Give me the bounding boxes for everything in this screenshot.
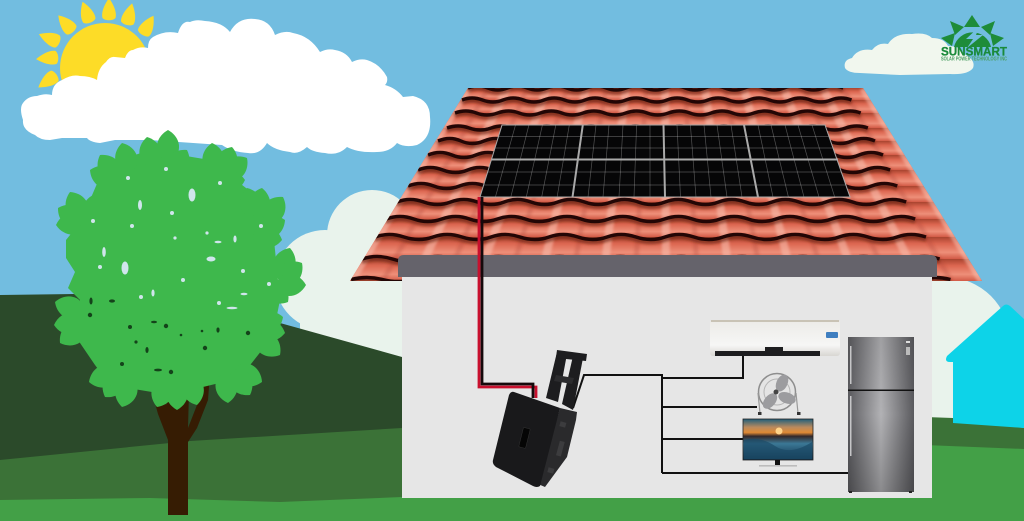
tree foliage	[51, 130, 309, 411]
tree trunk	[150, 374, 210, 515]
mid green hill, right	[925, 417, 1024, 455]
roof tile highlights	[351, 88, 982, 281]
solar cable: red and black	[479, 197, 536, 398]
refrigerator	[848, 337, 914, 493]
house wall	[402, 275, 932, 498]
panel cell grid	[470, 125, 860, 197]
television	[743, 419, 813, 467]
case front	[493, 392, 560, 487]
bright green foreground	[0, 445, 1024, 521]
logo: SunSmart	[941, 15, 1008, 62]
dark green back hill	[0, 294, 402, 470]
tiled roof	[340, 85, 990, 285]
roof tile shadow stripes	[383, 88, 951, 281]
case side	[538, 408, 577, 487]
foliage gaps showing hill	[88, 298, 250, 374]
portable power station	[493, 350, 587, 487]
floor fan	[758, 373, 800, 415]
case badge	[519, 427, 530, 448]
case latches	[547, 421, 566, 474]
solar panel array	[470, 125, 860, 197]
telescopic handle	[546, 350, 587, 410]
appliance wiring	[573, 356, 848, 473]
mid green hill, left	[0, 428, 402, 505]
small cyan house, right	[946, 304, 1024, 428]
pale background clouds	[275, 190, 1010, 425]
large white cloud	[21, 19, 430, 154]
foliage gaps showing sky	[91, 167, 271, 309]
small cloud, top right	[845, 34, 974, 75]
tree	[51, 130, 309, 515]
air conditioner	[710, 320, 840, 356]
roof wave lines	[351, 86, 950, 282]
grey roof eave	[398, 255, 937, 277]
panel frame and dividers	[480, 125, 850, 197]
logo: SunSmart: SOLAR POWER TECHNOLOGY INC	[941, 56, 1007, 62]
logo: SunSmart: SUNSMART	[941, 44, 1008, 58]
roof tile rows	[340, 88, 990, 281]
sun	[34, 0, 159, 113]
roof wave shadows	[351, 88, 950, 284]
